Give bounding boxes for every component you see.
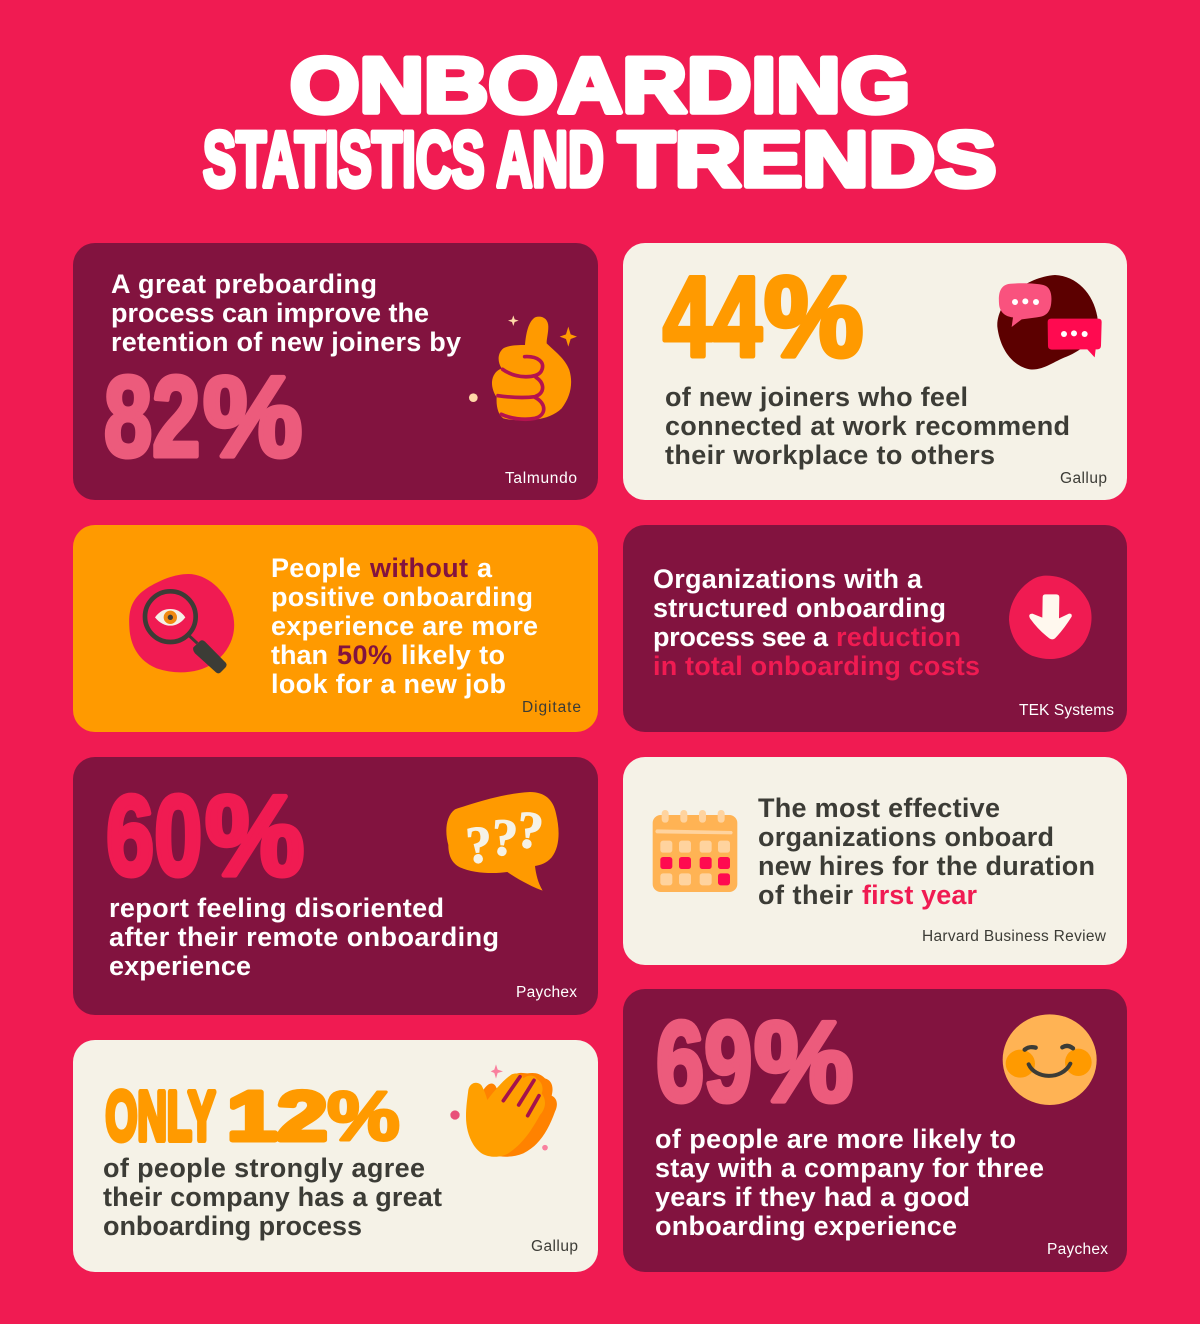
text: preboarding statement: retention of new joiners by [111,327,461,357]
text: cost reduction statement: reduction [836,622,961,652]
panel: only 12% agree [73,1040,598,1272]
text: stay three years statement: of people are more likely to [655,1124,1016,1154]
source: TEK Systems: TEK Systems [1019,702,1114,719]
source: Paychex: Paychex [516,984,577,1001]
text: disoriented statement [109,893,499,981]
text: job seeking statement: than [271,640,328,670]
stat: 44%: % [764,253,863,380]
text: disoriented statement: report feeling disoriented [109,893,444,923]
panel: first year onboarding [623,757,1127,965]
text: job seeking statement: look for a new job [271,669,506,699]
title: TRENDS [618,116,996,203]
stat: only 12%: % [327,1078,400,1156]
text: cost reduction statement [653,564,980,681]
text: job seeking statement: without [369,553,468,583]
icon: smiling face [1003,1014,1097,1105]
text: disoriented statement: experience [109,951,251,981]
stat: 44%: 44 [663,252,762,381]
title [203,41,996,203]
text: stay three years statement: stay with a company for three [655,1153,1044,1183]
text: effective organizations statement: The most effective [758,793,1000,823]
stat: 60% [106,772,304,900]
icon: question speech bubble: ? [514,800,546,861]
stat: 82%: 82 [104,354,200,481]
text: cost reduction statement: process see a [653,622,829,652]
text: great process statement: their company has a great [103,1182,442,1212]
title: STATISTICS AND [203,116,604,203]
text: cost reduction statement: Organizations with a [653,564,923,594]
source: Talmundo: Talmundo [505,470,577,487]
source: Harvard Business Review: Harvard Business Review [922,928,1107,945]
text: job seeking statement [271,553,538,699]
stat: only 12%: 12 [227,1078,327,1156]
stat: 60%: 60 [106,773,202,900]
text: job seeking statement: People [271,553,361,583]
text: job seeking statement: a [477,553,493,583]
text: great process statement: of people strongly agree [103,1153,425,1183]
stat: only 12% [106,1078,400,1156]
panel: remote onboarding [73,757,598,1015]
source: Gallup: Gallup [531,1238,578,1255]
text: connected joiners statement: connected at work recommend [665,411,1070,441]
text: great process statement [103,1153,442,1241]
text: stay three years statement: onboarding experience [655,1211,957,1241]
stat: 44% [663,252,863,381]
icon: thumbs up [469,315,577,420]
text: connected joiners statement: their workplace to others [665,440,995,470]
text: effective organizations statement [758,793,1095,910]
text: job seeking statement: likely to [401,640,505,670]
title: ONBOARDING [290,41,910,129]
text: stay three years statement [655,1124,1044,1241]
text: cost reduction statement: structured onboarding [653,593,946,623]
panel: structured onboarding costs [623,525,1127,732]
stat: 82% [104,353,302,481]
text: great process statement: onboarding process [103,1211,362,1241]
icon: question speech bubble [446,792,559,891]
panel: positive onboarding experience [73,525,598,732]
source: Gallup: Gallup [1060,470,1107,487]
icon: down arrow [1009,576,1092,659]
text: effective organizations statement: first year [862,880,977,910]
text: effective organizations statement: of their [758,880,853,910]
text: job seeking statement: 50% [337,640,392,670]
icon: question speech bubble: ? [489,808,520,868]
stat: 82%: % [203,353,302,480]
text: disoriented statement: after their remote onboarding [109,922,499,952]
icon: chat bubbles [997,275,1102,369]
stat: 69% [656,998,853,1126]
stat: 69%: 69 [656,999,752,1126]
icon: clapping hands [450,1064,557,1157]
text: job seeking statement: positive onboarding [271,582,533,612]
text: preboarding statement [111,269,461,357]
panel: preboarding retention [73,243,598,500]
icon: question speech bubble: ? [464,815,494,875]
icon: magnifier with eye [129,574,234,673]
source: Paychex: Paychex [1047,1241,1108,1258]
stat: 69%: % [754,998,853,1125]
text: cost reduction statement: in total onboarding costs [653,651,980,681]
text: connected joiners statement [665,382,1070,470]
text: connected joiners statement: of new joiners who feel [665,382,968,412]
text: effective organizations statement: new hires for the duration [758,851,1095,881]
source: Digitate: Digitate [522,699,581,716]
text: preboarding statement: A great preboarding [111,269,377,299]
text: effective organizations statement: organizations onboard [758,822,1054,852]
stat: 60%: % [205,772,304,899]
panel: connection at work [623,243,1127,500]
text: stay three years statement: years if they had a good [655,1182,970,1212]
panel: three year retention [623,989,1127,1272]
stat: only 12%: ONLY [106,1078,215,1156]
text: job seeking statement: experience are more [271,611,538,641]
text: preboarding statement: process can improve the [111,298,429,328]
icon: calendar [653,810,737,892]
